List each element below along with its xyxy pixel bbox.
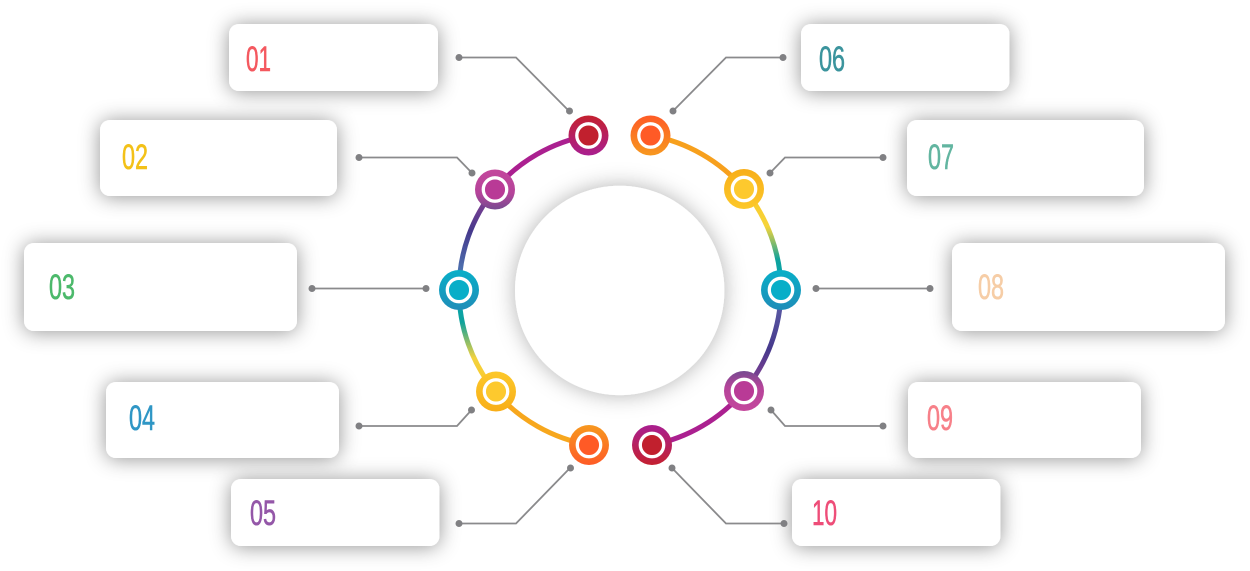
node 06 bbox=[630, 116, 670, 156]
card 03: 03 bbox=[49, 268, 75, 307]
card 06 bbox=[801, 24, 1010, 91]
card 09 bbox=[908, 382, 1141, 458]
node 10 bbox=[632, 425, 672, 465]
connector 01 bbox=[456, 54, 573, 114]
card 04 bbox=[106, 382, 339, 458]
node 08 bbox=[761, 270, 801, 310]
node 01 bbox=[568, 116, 608, 156]
node 02 bbox=[475, 170, 515, 210]
node 03 bbox=[439, 270, 479, 310]
connector 03 bbox=[308, 285, 430, 292]
card 10 bbox=[792, 479, 1000, 546]
card 05: 05 bbox=[250, 494, 276, 533]
connector 02 bbox=[356, 154, 476, 176]
connector 08 bbox=[812, 285, 934, 292]
connector 04 bbox=[356, 406, 475, 430]
card 10: 10 bbox=[812, 494, 837, 533]
card 08 bbox=[952, 243, 1225, 331]
card 01 bbox=[229, 24, 438, 91]
node 05 bbox=[569, 425, 609, 465]
node 07 bbox=[724, 169, 764, 209]
connector 05 bbox=[456, 464, 574, 527]
card 04: 04 bbox=[129, 399, 155, 438]
connector 10 bbox=[668, 464, 788, 527]
card 01: 01 bbox=[246, 40, 271, 79]
card 07: 07 bbox=[928, 138, 954, 177]
connector 06 bbox=[670, 54, 786, 114]
node 09 bbox=[724, 371, 764, 411]
card 08: 08 bbox=[978, 268, 1004, 307]
central circle bbox=[515, 186, 724, 395]
connector 09 bbox=[768, 406, 886, 430]
card 02: 02 bbox=[122, 138, 148, 177]
card 07 bbox=[907, 120, 1144, 196]
card 06: 06 bbox=[819, 40, 845, 79]
card 02 bbox=[100, 120, 337, 196]
card 05 bbox=[231, 479, 440, 546]
ring arcs bbox=[459, 136, 781, 445]
card 09: 09 bbox=[927, 399, 953, 438]
card 03 bbox=[24, 243, 297, 331]
connector 07 bbox=[766, 154, 886, 176]
node 04 bbox=[476, 372, 516, 412]
